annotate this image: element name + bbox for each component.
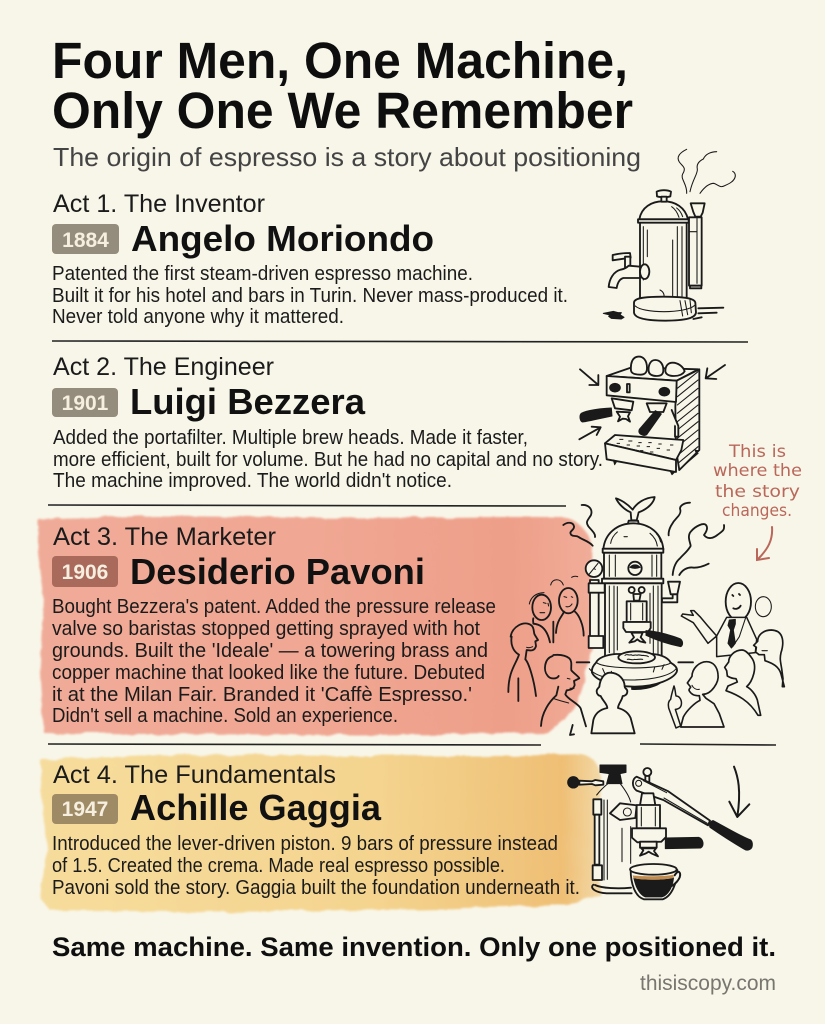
badge 1884: 1884 — [62, 229, 109, 252]
source URL: thisiscopy.com — [640, 972, 776, 995]
badge 1947: 1947 — [62, 798, 108, 821]
illustration: Pavoni Ideale machine and crowd — [508, 497, 784, 735]
annotation: this is where the story changes — [713, 442, 802, 560]
act 3 body: Bought Bezzera's patent. Added the pressure release — [52, 596, 496, 618]
panel: act 1 — [52, 149, 735, 328]
name: Desiderio Pavoni: Desiderio Pavoni — [130, 551, 425, 592]
audience back left — [508, 576, 584, 701]
panel: act 2 — [52, 353, 725, 492]
divider — [48, 505, 566, 506]
act 3 body — [52, 596, 496, 727]
annotation: this is where the story changes: where the — [713, 461, 802, 481]
closing line: Same machine. Same invention. Only one positioned it. — [52, 932, 776, 962]
presenter — [681, 583, 771, 657]
name: Angelo Moriondo: Angelo Moriondo — [131, 218, 434, 259]
badge 1901: 1901 — [62, 392, 109, 415]
panel: act 4 — [40, 754, 752, 912]
badge 1884 — [52, 224, 119, 254]
name: Achille Gaggia: Achille Gaggia — [130, 787, 382, 828]
act 1 body — [52, 263, 568, 328]
act 2 body: The machine improved. The world didn't notice. — [53, 470, 452, 492]
panel: act 3 — [38, 497, 784, 735]
badge 1906 — [52, 556, 118, 587]
act 2 body: Added the portafilter. Multiple brew heads. Made it faster, — [53, 427, 528, 449]
annotation: this is where the story changes: This is — [728, 442, 786, 462]
badge 1901 — [52, 388, 118, 417]
name: Luigi Bezzera: Luigi Bezzera — [130, 381, 366, 422]
machine — [577, 497, 693, 689]
badge 1906: 1906 — [62, 561, 108, 584]
act 4 body: of 1.5. Created the crema. Made real espresso possible. — [52, 855, 505, 877]
act 2 body — [53, 427, 603, 492]
act 3 body: Didn't sell a machine. Sold an experience. — [52, 705, 398, 727]
steam — [563, 503, 724, 575]
title — [52, 32, 633, 139]
act 4 body: Pavoni sold the story. Gaggia built the foundation underneath it. — [52, 877, 580, 899]
act 3 body: valve so baristas stopped getting sprayed with hot — [52, 618, 480, 640]
title: Four Men, One Machine, — [52, 32, 628, 89]
act 4 label: Act 4. The Fundamentals — [53, 761, 336, 789]
act 2 body: more efficient, built for volume. But he had no capital and no story. — [53, 449, 603, 471]
annotation: this is where the story changes: the story — [715, 482, 800, 502]
act 2 label: Act 2. The Engineer — [53, 353, 274, 381]
icon: Moriondo steam machine — [603, 149, 735, 321]
act 1 label: Act 1. The Inventor — [53, 190, 265, 218]
red watercolor wash — [38, 516, 594, 735]
audience right — [668, 630, 784, 728]
audience front left — [541, 655, 586, 735]
yellow watercolor wash — [40, 754, 602, 912]
act 1 body: Patented the first steam-driven espresso machine. — [52, 263, 473, 285]
act 4 body — [52, 833, 580, 899]
divider — [48, 744, 776, 745]
icon: Bezzera machine — [579, 357, 725, 475]
audience front centre, seen from behind — [591, 673, 635, 733]
act 3 body: grounds. Built the 'Ideale' — a towering brass and — [52, 640, 488, 662]
badge 1947 — [52, 794, 118, 824]
act 3 label: Act 3. The Marketer — [53, 523, 276, 551]
act 4 body: Introduced the lever-driven piston. 9 bars of pressure instead — [52, 833, 558, 855]
annotation: this is where the story changes: changes. — [722, 501, 792, 521]
act 1 body: Never told anyone why it mattered. — [52, 306, 344, 328]
subtitle: The origin of espresso is a story about positioning — [53, 142, 641, 172]
divider — [52, 341, 748, 342]
act 3 body: it at the Milan Fair. Branded it 'Caffè Espresso.' — [52, 684, 472, 706]
act 1 body: Built it for his hotel and bars in Turin. Never mass-produced it. — [52, 285, 568, 307]
icon: Gaggia lever machine and cup — [568, 765, 752, 899]
title: Only One We Remember — [52, 82, 633, 139]
act 3 body: copper machine that looked like the future. Debuted — [52, 662, 485, 684]
